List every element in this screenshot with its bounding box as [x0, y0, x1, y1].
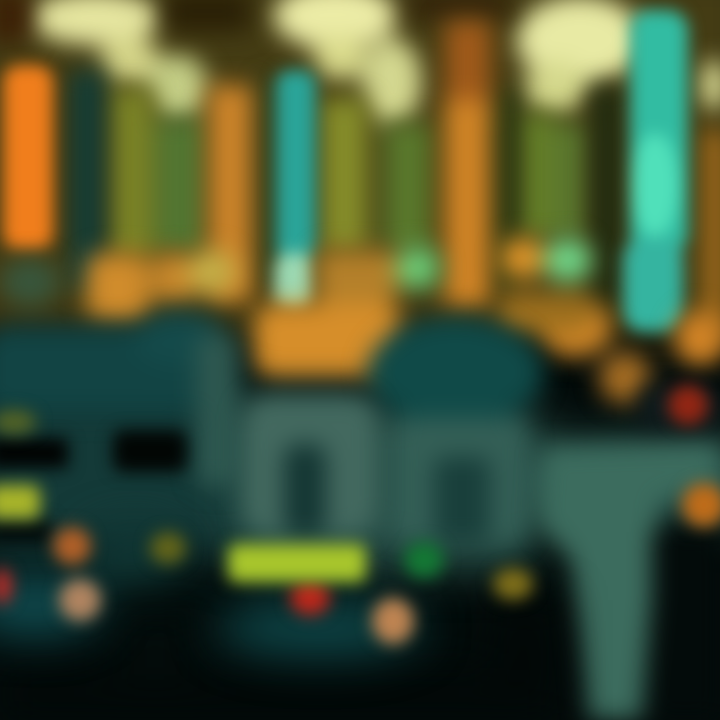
orange floor band: [86, 238, 720, 404]
ceiling glow: [29, 0, 720, 126]
column: bright orange left: [3, 65, 53, 250]
panels: olive green columns: [108, 88, 589, 258]
small indicator lights: [0, 385, 720, 644]
machine silhouette left: [0, 258, 240, 487]
lower hall base: [0, 385, 720, 570]
machine silhouette centre right: [367, 317, 543, 542]
lime display bar: [228, 544, 366, 582]
arch structure centre: [243, 396, 377, 535]
column: teal centre: [274, 70, 316, 311]
column: teal right: [623, 10, 688, 332]
black bars left: [0, 430, 187, 544]
control desk centre-bottom: [0, 527, 425, 658]
dark teal columns: [70, 70, 622, 305]
upper wall: [0, 0, 720, 335]
orange columns: [208, 20, 720, 342]
dark ceiling beams: [0, 0, 510, 42]
walkway right: [538, 385, 720, 720]
dark shadow floor: [0, 600, 560, 720]
